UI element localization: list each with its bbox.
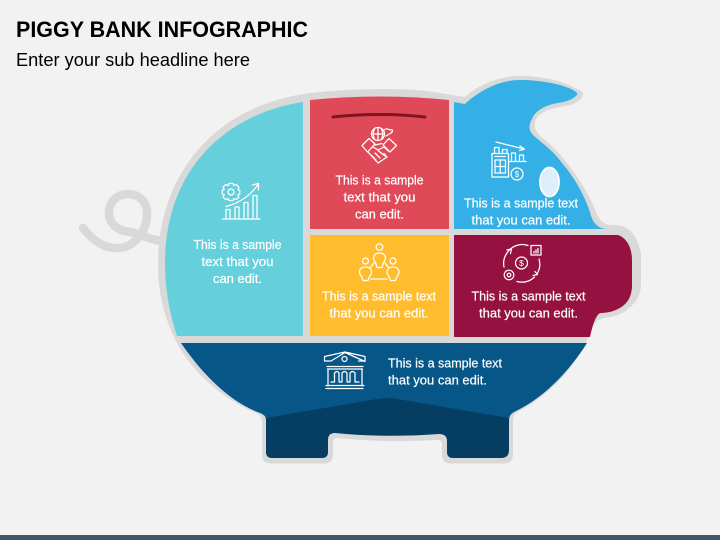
teal shape xyxy=(165,102,303,336)
pig eye xyxy=(540,168,559,196)
dark feet shape xyxy=(266,398,509,458)
maroon shape xyxy=(454,235,632,337)
panel: navy belly and feet xyxy=(181,343,587,458)
navy text xyxy=(388,356,502,388)
icon: money cycle xyxy=(504,245,541,282)
navy belly shape xyxy=(181,343,587,420)
footer bar xyxy=(0,535,720,540)
panel: red top xyxy=(310,96,449,229)
red text xyxy=(336,172,424,222)
dollar sign: $ xyxy=(515,170,520,179)
icon: calculator and declining bars xyxy=(492,142,526,180)
maroon text: that you can edit. xyxy=(479,306,578,321)
blue shape xyxy=(454,80,607,229)
coin slot xyxy=(333,114,425,117)
pig tail xyxy=(83,194,162,248)
blue text xyxy=(464,196,578,228)
teal text xyxy=(194,237,282,286)
navy text: This is a sample text xyxy=(388,356,502,371)
panel: yellow centre xyxy=(310,235,449,336)
yellow text xyxy=(322,289,436,321)
blue text: This is a sample text xyxy=(464,196,578,211)
panel: teal left xyxy=(165,102,303,336)
icon: people with light bulbs xyxy=(360,244,399,280)
panel: maroon snout xyxy=(454,235,632,337)
red text: This is a sample xyxy=(336,172,424,188)
pig body outline xyxy=(158,76,641,464)
yellow shape xyxy=(310,235,449,336)
yellow text: This is a sample text xyxy=(322,289,436,304)
dollar sign: $ xyxy=(519,258,524,268)
teal text: can edit. xyxy=(213,271,262,286)
red shape xyxy=(310,96,449,229)
icon: gear and growth chart xyxy=(222,184,260,219)
navy text: that you can edit. xyxy=(388,373,487,388)
red text: can edit. xyxy=(355,206,404,222)
icon: bank building xyxy=(324,352,365,388)
title: PIGGY BANK INFOGRAPHIC xyxy=(16,17,308,42)
teal text: This is a sample xyxy=(194,237,282,252)
teal text: text that you xyxy=(202,254,274,269)
blue text: that you can edit. xyxy=(472,213,570,228)
red text: text that you xyxy=(344,190,416,204)
maroon text xyxy=(472,289,586,321)
panel: blue head xyxy=(454,80,607,229)
icon: globe handshake xyxy=(362,128,396,163)
yellow text: that you can edit. xyxy=(330,306,428,321)
maroon text: This is a sample text xyxy=(472,289,586,304)
subtitle: Enter your sub headline here xyxy=(16,50,250,70)
